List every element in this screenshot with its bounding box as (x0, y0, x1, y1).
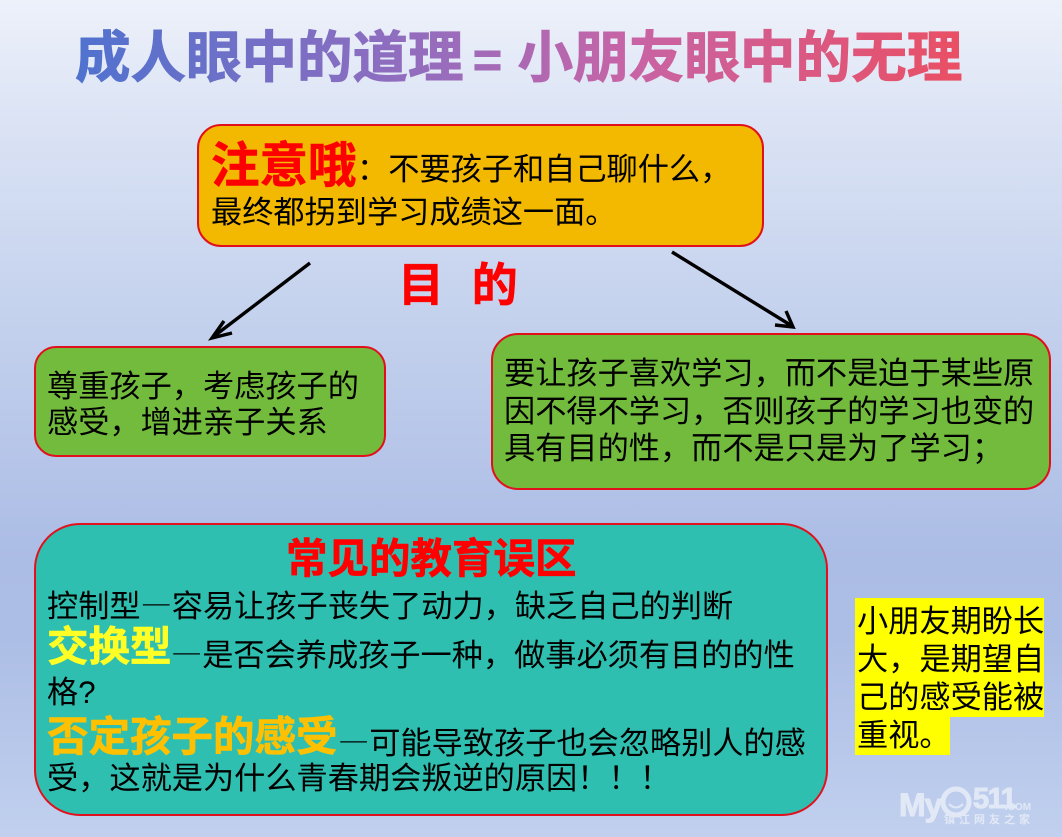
callout: child wish (855, 598, 1044, 755)
panel: love learning (491, 333, 1051, 490)
panel: respect child (34, 346, 386, 457)
label: exchange type: 交换型 (47, 623, 172, 670)
heading: attention: 注意哦 (211, 139, 357, 193)
text: respect line 1: 尊重孩子，考虑孩子的 (47, 369, 359, 404)
text: exchange line 1: —是否会养成孩子一种，做事必须有目的的性 (171, 630, 795, 675)
text: wish line 2: 大，是期望自 (857, 642, 1044, 677)
panel: common mistakes (34, 523, 828, 816)
highlight: last line (855, 717, 950, 755)
text: learning line 1: 要让孩子喜欢学习，而不是迫于某些原 (504, 356, 1034, 391)
text: learning line 2: 因不得不学习，否则孩子的学习也变的 (504, 394, 1034, 429)
arrow: left (208, 262, 311, 341)
watermark (899, 783, 1034, 826)
panel: attention note (197, 124, 764, 247)
text: exchange line 2: 格? (47, 675, 96, 710)
watermark caption: 镇江网友之家 (944, 814, 1034, 826)
text: control type: 控制型—容易让孩子丧失了动力，缺乏自己的判断 (47, 581, 733, 626)
heading: purpose: 目 的 (398, 259, 518, 311)
text: wish line 1: 小朋友期盼长 (857, 604, 1044, 639)
watermark digits: 511 (973, 783, 1015, 815)
text: attention line 2: 最终都拐到学习成绩这一面。 (211, 195, 616, 230)
text: denying line 2: 受，这就是为什么青春期会叛逆的原因！！！ (47, 761, 671, 796)
text: respect line 2: 感受，增进亲子关系 (47, 405, 328, 440)
highlight: top lines (855, 598, 1044, 717)
text: learning line 3: 具有目的性，而不是只是为了学习； (504, 431, 1003, 466)
watermark domain: .COM (1005, 802, 1031, 813)
text: wish line 3: 己的感受能被 (857, 680, 1044, 715)
text: attention line 1: ：不要孩子和自己聊什么， (357, 152, 731, 187)
text: denying line 1: —可能导致孩子也会忽略别人的感 (338, 718, 806, 763)
arrow: right (671, 250, 796, 329)
text: wish line 4: 重视。 (857, 718, 951, 753)
title: 成人眼中的道理 = 小朋友眼中的无理 (75, 27, 962, 89)
watermark smiley (940, 786, 972, 818)
label: denying feelings: 否定孩子的感受 (47, 713, 338, 760)
watermark letters My: My (899, 787, 941, 823)
heading: common mistakes: 常见的教育误区 (286, 535, 577, 582)
